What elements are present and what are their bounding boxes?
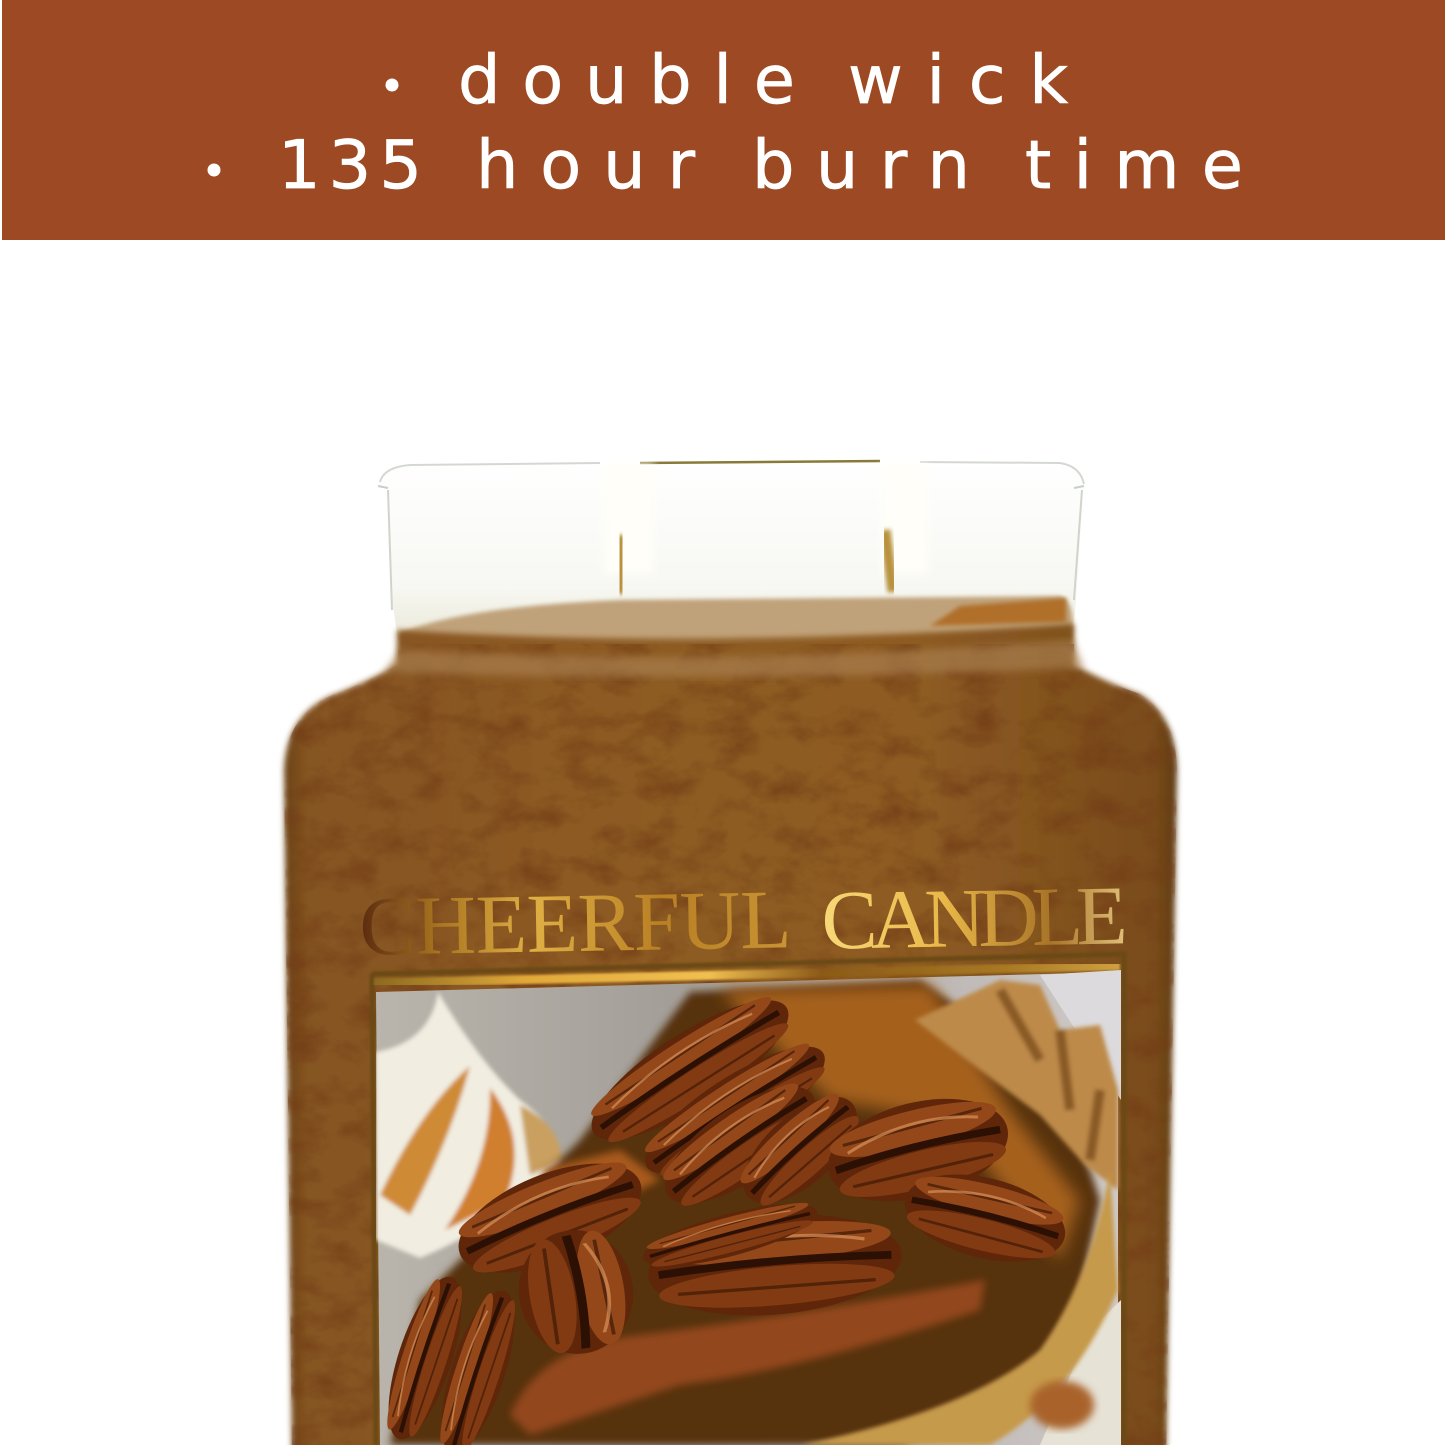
wicks and glow bbox=[604, 464, 928, 594]
crust bbox=[800, 980, 1118, 1445]
whipped cream bbox=[376, 992, 562, 1258]
feature line: burn time bbox=[208, 126, 1243, 204]
header banner bbox=[2, 0, 1445, 240]
feature line: double wick: double bbox=[458, 41, 795, 119]
feature line: burn time: burn bbox=[752, 126, 970, 204]
feature line: double wick bbox=[386, 41, 1068, 119]
plate bbox=[1040, 970, 1121, 1100]
neck highlight bbox=[385, 640, 1084, 677]
feature line: burn time: hour bbox=[476, 126, 695, 204]
brand name bbox=[359, 869, 1128, 974]
label photo bbox=[376, 970, 1121, 1445]
pie filling bbox=[390, 980, 1100, 1445]
feature line: burn time: time bbox=[1025, 126, 1243, 204]
candle jar bbox=[270, 461, 1190, 1445]
brand name: CANDLE bbox=[821, 869, 1128, 968]
pecan halves bbox=[373, 977, 1074, 1445]
jar body with neck bbox=[284, 624, 1177, 1445]
feature line: burn time: 135 bbox=[278, 126, 422, 204]
wax top surface bbox=[402, 596, 1073, 645]
brand name: CHEERFUL bbox=[359, 873, 792, 974]
gold label border bbox=[372, 954, 1124, 1445]
caramel bbox=[510, 1280, 985, 1435]
glass rim bbox=[378, 461, 1084, 640]
wax mottling bbox=[270, 640, 1190, 1445]
feature line: double wick: wick bbox=[848, 41, 1068, 119]
